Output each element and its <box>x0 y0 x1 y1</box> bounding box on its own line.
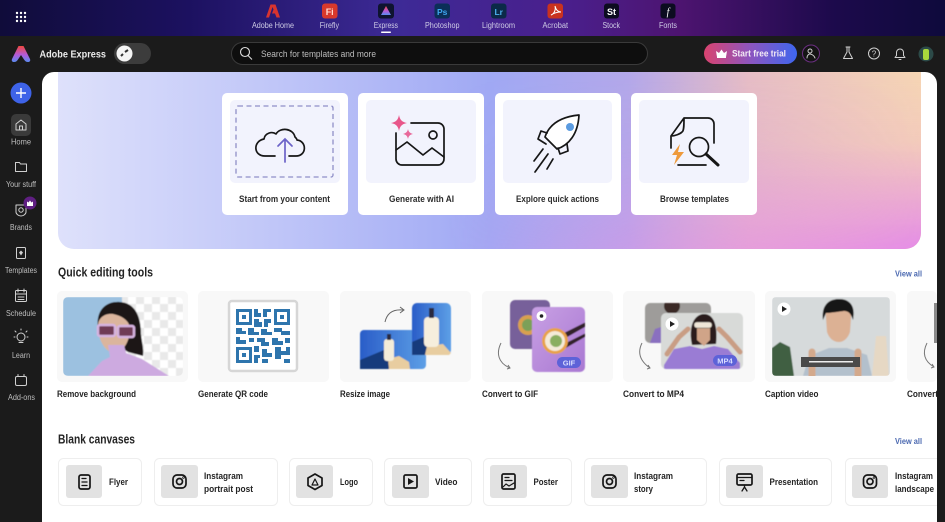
nav: Your stuff: Your stuff <box>6 180 37 189</box>
app: Adobe Home <box>252 4 294 30</box>
icon: instagram <box>603 475 616 488</box>
arrow <box>385 307 404 322</box>
card: Explore quick actions: Explore quick actions <box>516 194 599 205</box>
app: Firefly: Firefly <box>320 21 339 30</box>
card: Browse templates <box>631 93 757 215</box>
tile: Generate QR code: Generate QR code <box>198 389 268 400</box>
nav: Learn <box>12 329 30 360</box>
link: View all canvases: View all <box>895 436 922 446</box>
icon: rocket <box>534 115 579 172</box>
button: Start free trial: Start free trial <box>732 48 786 60</box>
icon: play <box>404 475 417 488</box>
tile: Convert to MP4: Convert to MP4 <box>623 389 685 400</box>
illustration: sushi frames <box>510 300 590 372</box>
tile: Caption video: Caption video <box>765 389 819 400</box>
nav: Home <box>11 114 32 146</box>
canvas: Presentation: Presentation <box>770 477 818 488</box>
tile: Caption video <box>765 297 890 399</box>
canvas: Instagram portrait post: portrait post <box>204 484 254 495</box>
nav: Learn: Learn <box>12 351 30 360</box>
canvas: Logo: Logo <box>340 477 358 488</box>
icon: flyer <box>79 475 90 489</box>
hero banner <box>58 72 921 249</box>
top product bar <box>0 0 945 36</box>
canvas: Instagram portrait post: Instagram <box>204 471 243 482</box>
link: View all tools: View all <box>895 268 922 278</box>
app: Express: Express <box>374 21 398 30</box>
button: create <box>10 82 32 104</box>
header bar <box>12 42 934 64</box>
nav: Home: Home <box>11 138 32 146</box>
icon: logo hexagon <box>308 474 322 490</box>
app: Firefly: Fi <box>326 7 334 17</box>
icon: collaborators <box>802 45 820 62</box>
search field: Search for templates and more <box>261 49 376 60</box>
tile: Convert (cropped) <box>907 291 939 400</box>
app: Photoshop: Ps <box>437 7 448 17</box>
app: Acrobat: Acrobat <box>542 21 569 30</box>
card: Generate with AI <box>358 93 484 215</box>
canvas: Flyer <box>58 458 142 506</box>
canvas: Instagram landscape: Instagram <box>895 471 933 482</box>
heading: Blank canvases: Blank canvases <box>58 432 135 446</box>
avatar <box>918 46 934 62</box>
tile: Convert to MP4 <box>623 302 744 397</box>
card: Explore quick actions <box>495 93 621 215</box>
app: Stock: St <box>607 7 616 17</box>
canvas: Video <box>384 458 472 506</box>
app: Photoshop: Photoshop <box>425 21 460 30</box>
canvas: Poster: Poster <box>534 477 558 488</box>
nav: Add-ons <box>8 374 35 402</box>
icon: document search <box>671 118 718 165</box>
canvas: Video: Video <box>435 477 458 488</box>
icon: app grid <box>16 12 26 22</box>
icon: help <box>868 48 880 59</box>
canvas: Instagram story <box>584 458 706 506</box>
canvas: Instagram landscape <box>846 458 945 506</box>
card: Generate with AI: Generate with AI <box>389 194 454 205</box>
nav: Your stuff <box>6 162 37 189</box>
canvas: Instagram story: story <box>634 484 654 495</box>
nav: Templates: Templates <box>5 266 37 275</box>
QR code <box>236 309 290 363</box>
app: Express <box>374 4 398 33</box>
icon: help: ? <box>872 50 877 58</box>
left sidebar <box>5 82 37 402</box>
icon: flask <box>844 47 852 58</box>
canvas: Instagram portrait post <box>154 458 278 506</box>
icon: instagram <box>173 475 186 488</box>
app: Photoshop <box>425 4 460 30</box>
icon: bell <box>895 49 905 60</box>
icon: poster <box>502 474 515 489</box>
nav: Templates <box>5 248 37 275</box>
app: Firefly <box>320 4 339 30</box>
app: Fonts: Fonts <box>659 21 677 30</box>
arrow <box>498 343 510 369</box>
card: Start from your content: Start from your content <box>239 194 331 205</box>
canvas: Presentation <box>720 458 832 506</box>
illustration: video frames <box>645 298 743 369</box>
heading: Quick editing tools: Quick editing tools <box>58 264 153 280</box>
tile: Convert to GIF <box>482 299 586 397</box>
wordmark: Adobe Express <box>40 48 106 60</box>
logo: Adobe Express <box>12 46 30 62</box>
arrow <box>640 343 650 369</box>
nav: Add-ons: Add-ons <box>8 393 35 402</box>
icon: presentation <box>737 474 752 491</box>
tile: Resize image <box>340 291 471 400</box>
nav: Brands: Brands <box>10 223 32 232</box>
tile: Resize image: Resize image <box>340 389 390 400</box>
toggle <box>114 43 151 64</box>
search field <box>232 42 648 64</box>
tile: Remove background <box>58 297 183 399</box>
app: Fonts: f <box>667 7 671 18</box>
right edge strip <box>937 72 945 522</box>
tile: Remove background: Remove background <box>57 389 136 400</box>
tile: Generate QR code <box>198 291 329 400</box>
app: Stock: Stock <box>602 21 621 30</box>
card: Browse templates: Browse templates <box>660 194 729 205</box>
button: Start free trial <box>704 43 797 64</box>
canvas: Flyer: Flyer <box>109 477 128 488</box>
app: Stock <box>602 4 621 30</box>
nav: Schedule: Schedule <box>6 309 36 318</box>
canvas: Instagram landscape: landscape <box>895 484 934 495</box>
icon: image with sparkles <box>391 115 444 165</box>
nav: Brands <box>10 196 36 232</box>
app: Lightroom: Lightroom <box>482 21 515 30</box>
icon: instagram <box>864 475 876 488</box>
photo: presenter <box>772 297 890 376</box>
canvas: Logo <box>290 458 372 506</box>
nav: Schedule <box>6 289 36 318</box>
app: Adobe Home: Adobe Home <box>252 21 294 30</box>
tile: Convert to GIF: Convert to GIF <box>482 389 538 400</box>
app: Lightroom <box>482 4 515 30</box>
tile: Convert to GIF: GIF <box>563 358 576 368</box>
app: Fonts <box>659 4 677 30</box>
app: Lightroom: Lr <box>494 7 504 17</box>
icon: cloud upload <box>256 129 304 162</box>
canvas: Instagram story: Instagram <box>634 471 673 482</box>
app: Acrobat <box>542 4 569 30</box>
tile: Convert to MP4: MP4 <box>717 356 734 366</box>
tile: Convert (cropped): Convert <box>907 389 939 400</box>
canvas: Poster <box>484 458 572 506</box>
card: Start from your content <box>222 93 348 215</box>
photo: woman with sunglasses <box>63 297 183 376</box>
illustration: small and large bottle images <box>360 303 451 369</box>
